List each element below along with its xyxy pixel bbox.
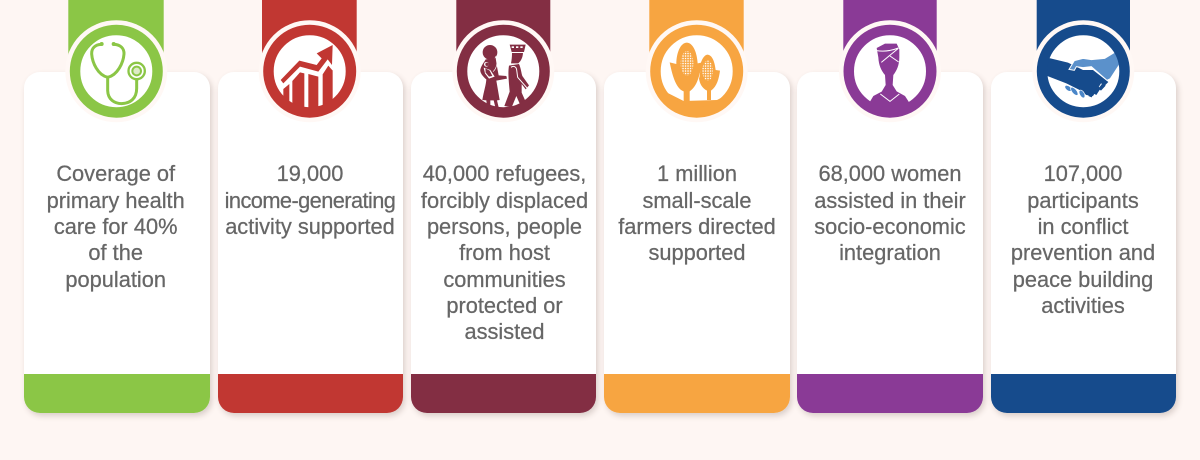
- text: income: activity supported: [225, 214, 395, 239]
- text: refugees: from host: [459, 240, 550, 265]
- icon: maize badge: [646, 0, 748, 122]
- panel: income card: [218, 72, 403, 413]
- footer band: health: [24, 374, 210, 413]
- panel: women card: [797, 72, 982, 413]
- text: farmers: [618, 161, 776, 265]
- icon: stethoscope badge: [65, 0, 167, 122]
- icon: woman badge: [839, 0, 941, 122]
- text: farmers: 1 million: [657, 161, 737, 186]
- text: refugees: 40,000 refugees,: [423, 161, 586, 186]
- text: health: primary health: [47, 188, 185, 213]
- text: income: income-generating: [225, 188, 395, 213]
- text: health: [47, 161, 185, 292]
- text: peace: participants: [1027, 188, 1139, 213]
- text: health: population: [65, 267, 166, 292]
- text: health: care for 40%: [54, 214, 177, 239]
- text: peace: [1011, 161, 1155, 318]
- icon: refugees badge: [452, 0, 554, 122]
- panel: farmers card: [604, 72, 790, 413]
- footer band: income: [218, 374, 403, 413]
- text: peace: 107,000: [1044, 161, 1122, 186]
- text: refugees: [421, 161, 588, 344]
- text: peace: prevention and: [1011, 240, 1155, 265]
- footer band: refugees: [411, 374, 596, 413]
- panel: peace card: [991, 72, 1176, 413]
- text: refugees: persons, people: [427, 214, 582, 239]
- text: income: 19,000: [277, 161, 343, 186]
- text: peace: activities: [1041, 293, 1125, 318]
- footer band: women: [797, 374, 982, 413]
- text: peace: in conflict: [1038, 214, 1128, 239]
- text: women: integration: [839, 240, 941, 265]
- text: peace: peace building: [1013, 267, 1153, 292]
- text: women: assisted in their: [814, 188, 966, 213]
- text: health: of the: [88, 240, 143, 265]
- text: women: 68,000 women: [818, 161, 962, 186]
- text: women: socio-economic: [814, 214, 966, 239]
- text: farmers: small-scale: [642, 188, 752, 213]
- text: farmers: farmers directed: [618, 214, 776, 239]
- panel: health card: [24, 72, 210, 413]
- text: farmers: supported: [649, 240, 745, 265]
- text: refugees: protected or: [446, 293, 563, 318]
- footer band: farmers: [604, 374, 790, 413]
- text: income: [225, 161, 395, 239]
- icon: growth chart badge: [259, 0, 361, 122]
- text: refugees: communities: [443, 267, 566, 292]
- text: refugees: forcibly displaced: [421, 188, 588, 213]
- panel: refugees card: [411, 72, 596, 413]
- text: health: Coverage of: [56, 161, 175, 186]
- footer band: peace: [991, 374, 1176, 413]
- icon: handshake badge: [1032, 0, 1134, 122]
- text: refugees: assisted: [465, 319, 544, 344]
- icons and ribbons: [66, 0, 1134, 122]
- text: women: [814, 161, 966, 265]
